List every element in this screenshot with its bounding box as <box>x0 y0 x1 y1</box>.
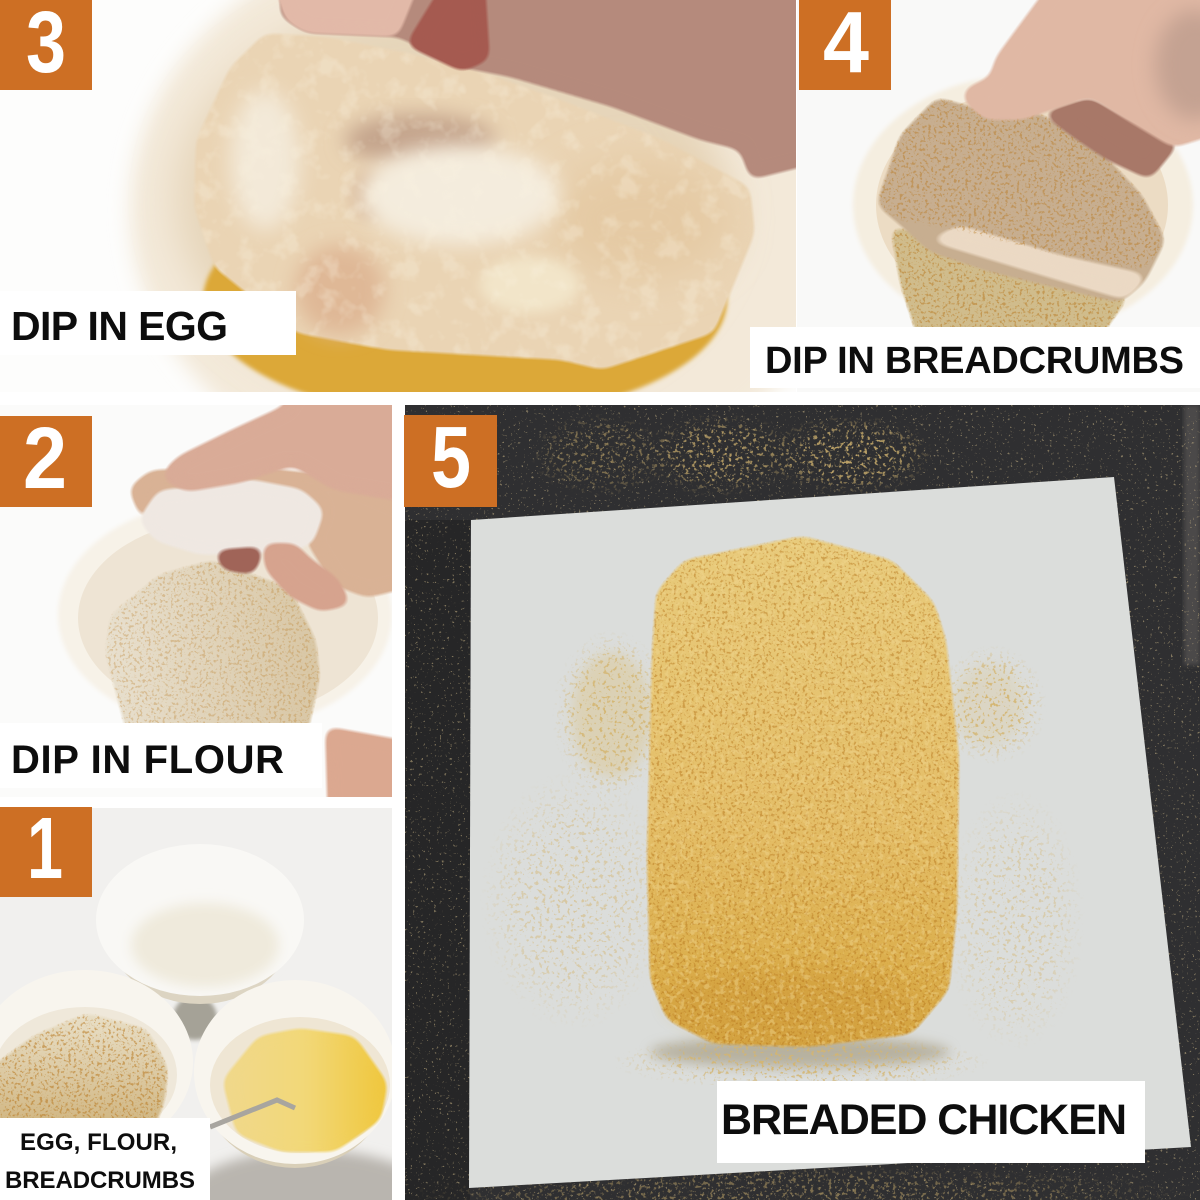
panel: step 1 ingredients <box>0 808 392 1200</box>
photo: raw chicken coated in egg <box>194 33 755 370</box>
badge: step 2: 2 <box>23 410 67 507</box>
photo: fingers behind chicken <box>1048 98 1176 178</box>
panel: step 4 dip in breadcrumbs <box>850 0 1200 327</box>
badge: step 1: 1 <box>27 800 63 897</box>
photo: bowl of breadcrumbs <box>0 978 190 1118</box>
caption: dip in egg: DIP IN EGG <box>11 303 228 349</box>
photo: hand pinching chicken <box>962 0 1200 148</box>
tray dark inner edge <box>405 520 470 1200</box>
photo: floured chicken <box>138 479 325 555</box>
photo: hand holding chicken <box>270 0 830 180</box>
panel: step 2 dip in flour <box>56 405 392 797</box>
photo: bowl of flour <box>124 905 276 1004</box>
photo: flour mound <box>105 560 320 723</box>
caption: dip in breadcrumbs <box>750 327 1200 388</box>
photo: bottom hand <box>324 727 392 797</box>
marble shadow <box>173 996 217 1040</box>
photo: egg in plate <box>200 262 730 392</box>
photo: hand gripping chicken <box>166 405 392 612</box>
panel: step 3 dip in egg <box>120 0 796 392</box>
caption: dip in flour: DIP IN FLOUR <box>11 738 284 782</box>
caption: egg, flour, breadcrumbs: BREADCRUMBS <box>5 1167 195 1194</box>
photo: fork <box>210 1100 295 1127</box>
caption: egg, flour, breadcrumbs: EGG, FLOUR, <box>20 1129 177 1156</box>
photo: bowl of egg <box>194 980 396 1168</box>
photo: parchment paper <box>469 477 1191 1188</box>
badge: step 3 <box>0 0 92 91</box>
badge: step 5: 5 <box>431 409 471 506</box>
badge: step 1 <box>0 800 92 897</box>
badge: step 4 <box>799 0 891 91</box>
caption: breaded chicken: BREADED CHICKEN <box>721 1096 1127 1144</box>
caption: dip in egg <box>0 291 296 355</box>
photo: raw chicken <box>130 468 392 598</box>
photo: crumbs on tray <box>400 405 1200 1200</box>
photo: breadcrumbs in bowl <box>892 228 1126 327</box>
photo: chicken coated in crumbs <box>876 97 1166 303</box>
photo: breaded chicken <box>647 536 959 1047</box>
tray rim detail <box>1184 405 1200 665</box>
caption: breaded chicken <box>717 1081 1145 1163</box>
badge: step 2 <box>0 410 92 507</box>
caption: egg, flour, breadcrumbs <box>0 1118 210 1200</box>
badge: step 5 <box>404 409 497 507</box>
caption: dip in breadcrumbs: DIP IN BREADCRUMBS <box>765 340 1184 382</box>
caption: dip in flour <box>0 723 322 788</box>
panel: step 5 breaded chicken <box>400 405 1200 1200</box>
photo: scattered crumbs <box>480 630 1085 1090</box>
